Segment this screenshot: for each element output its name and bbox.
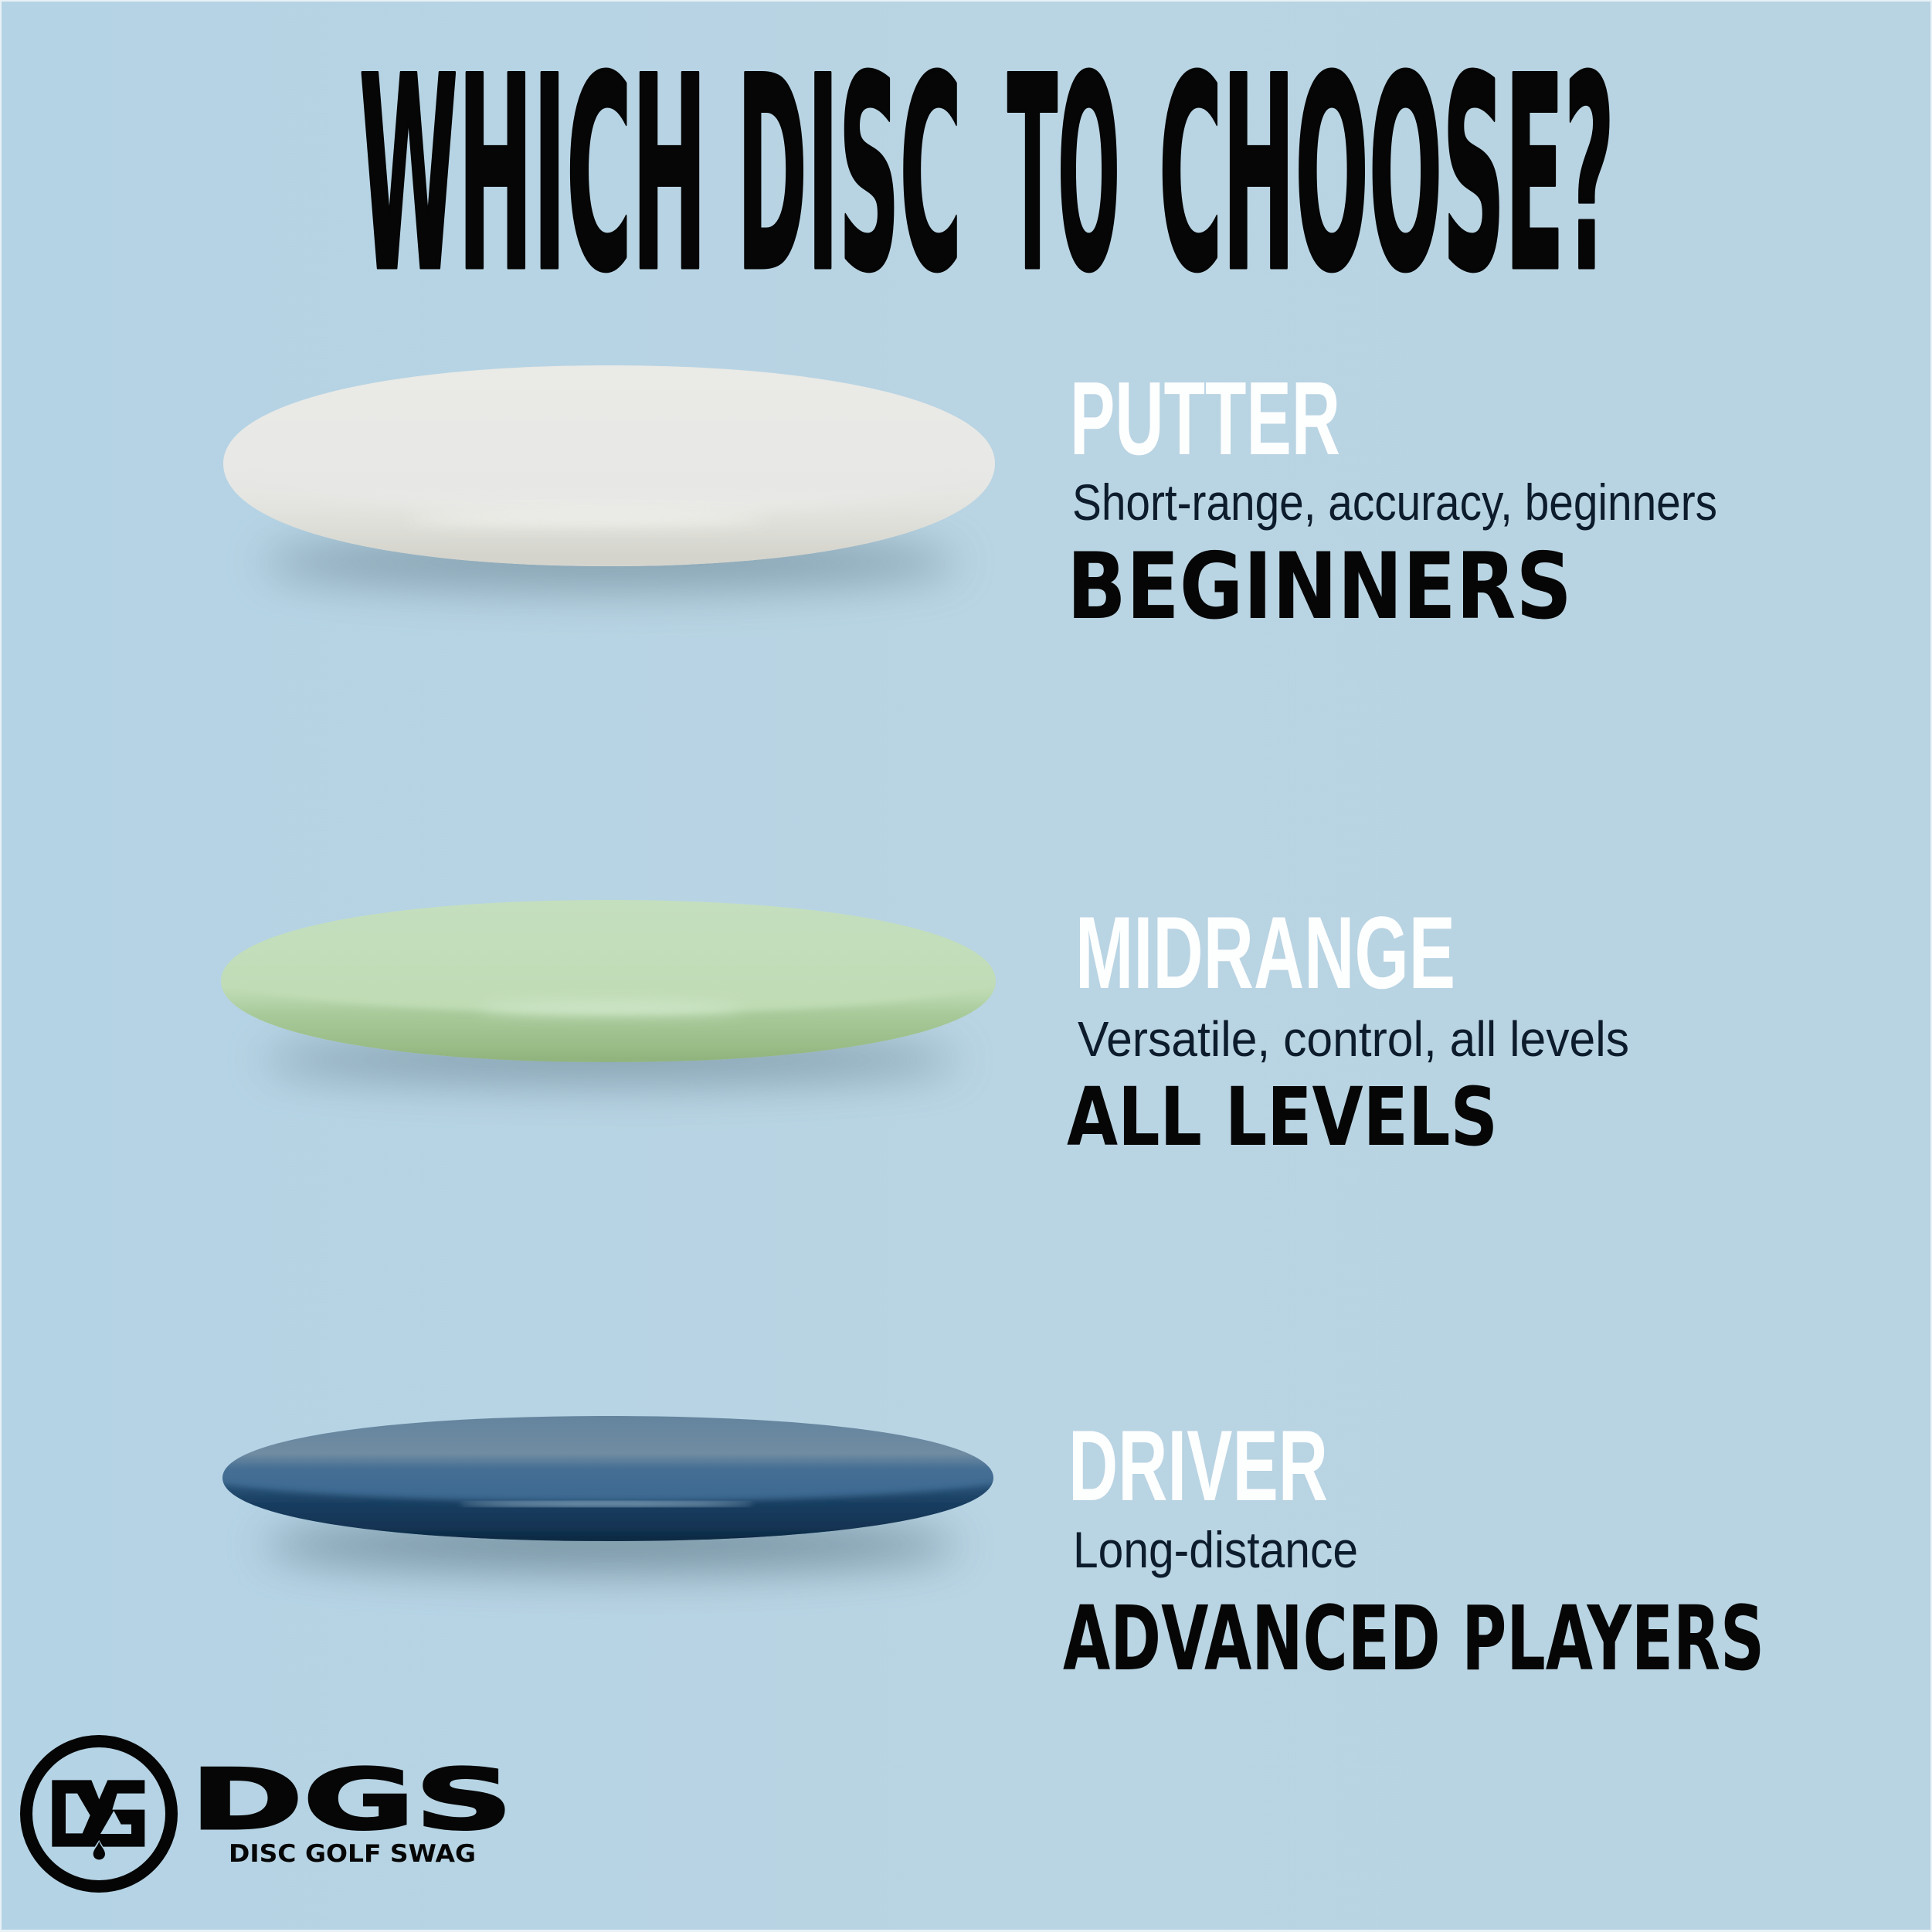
heading: driver: DRIVER [1068,1409,1328,1522]
description: midrange: Versatile, control, all levels [1078,1011,1629,1067]
audience: beginners: BEGINNERS [1067,534,1572,640]
heading: putter: PUTTER [1070,360,1340,477]
icon: DG monogram emblem [26,1741,171,1886]
disc: green midrange [216,900,1000,1083]
disc: white putter [216,365,1000,590]
panel: midrange [216,896,1629,1164]
tagline: disc golf swag: DISC GOLF SWAG [229,1840,476,1868]
disc: blue driver [216,1416,1000,1571]
panel: driver [222,1416,1760,1670]
wordmark: DGS: DGS [190,1752,513,1849]
title: WHICH [359,21,707,331]
title: TO [1007,21,1120,331]
title: DISC [737,21,962,331]
heading: midrange: MIDRANGE [1075,896,1455,1010]
description: driver: Long-distance [1073,1521,1358,1578]
audience: all levels: ALL LEVELS [1067,1070,1498,1164]
panel: putter [223,365,1716,620]
logo: Disc Golf Swag [26,1741,513,1886]
description: putter: Short-range, accuracy, beginners [1072,474,1717,531]
